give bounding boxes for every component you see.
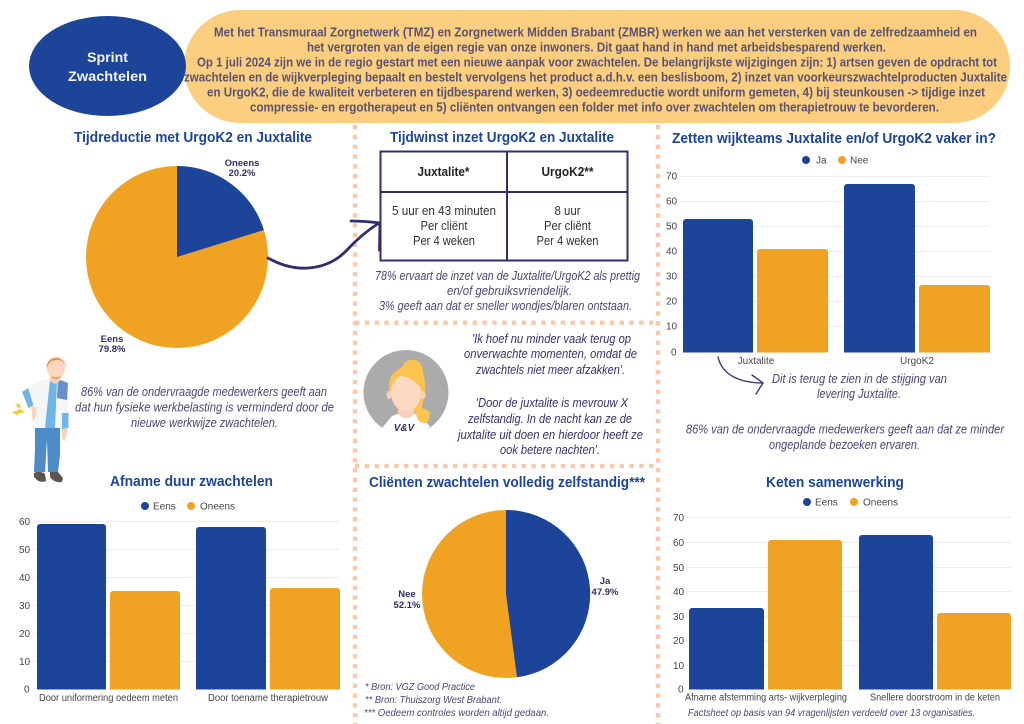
pie chart: zelfstandig: Ja	[600, 576, 611, 587]
legend: Oneens	[200, 502, 235, 512]
quotes: onverwachte momenten, omdat de	[464, 347, 637, 361]
bar chart: wijkteams: 20	[666, 296, 678, 308]
bar chart: afname duur: 50	[19, 545, 31, 556]
pie chart: tijdreductie: 79.8%	[99, 344, 126, 355]
heading: Tijdreductie: Tijdreductie met UrgoK2 en Juxtalite	[74, 130, 312, 146]
table: tijdwinst: Per cliënt	[544, 218, 591, 233]
bar chart: keten samenwerking: 10	[673, 661, 685, 672]
table: tijdwinst: Per 4 weken	[413, 233, 475, 248]
bar chart: keten samenwerking: 40	[673, 587, 685, 598]
text: fysieke werkbelasting: nieuwe werkwijze zwachtelen.	[131, 416, 278, 430]
table: tijdwinst: Per 4 weken	[536, 233, 598, 248]
avatar: V&V	[364, 350, 448, 436]
pie chart: zelfstandig: Nee	[398, 589, 416, 600]
arrow: curved to levering text	[718, 357, 763, 394]
arrow: pie to table	[268, 221, 380, 268]
quotes: zwachtels niet meer afzakken'.	[475, 363, 625, 377]
bar chart: wijkteams: UrgoK2	[900, 356, 934, 367]
pie chart: zelfstandig: 47.9%	[592, 587, 619, 598]
heading: Tijdwinst: Tijdwinst inzet UrgoK2 en Juxtalite	[390, 130, 614, 146]
intro banner: compressie- en ergotherapeut en 5) cliënten ontvangen een folder met info over zwachtelen om therapietrouw te bevorderen.	[250, 100, 939, 114]
table: tijdwinst: UrgoK2**	[542, 165, 594, 179]
bar chart: afname duur: 0	[24, 684, 30, 696]
bar chart: afname duur: 60	[19, 517, 31, 528]
bar chart: afname duur: 30	[19, 601, 31, 612]
text: stijging levering: Dit is terug te zien in de stijging van	[772, 372, 947, 386]
bar chart: afname duur: 10	[19, 657, 31, 668]
legend	[141, 502, 235, 512]
bar chart: keten samenwerking: 20	[673, 636, 685, 647]
quotes: 'Ik hoef nu minder vaak terug op	[472, 332, 631, 346]
bar chart: afname duur	[19, 502, 340, 704]
footnotes	[364, 682, 549, 719]
text: gebruiksvriendelijkheid	[375, 269, 640, 313]
bar chart: afname duur: 40	[19, 573, 31, 584]
intro banner: en UrgoK2, die de kwaliteit verbeteren en tijdbesparend werken, 3) oedeemreductie wordt uniform gemeten, 4) bij steunkousen -> tijdige inzet	[207, 86, 986, 100]
pie chart: tijdreductie: Oneens	[225, 158, 259, 169]
heading: Afname duur: Afname duur zwachtelen	[110, 474, 273, 490]
legend	[802, 156, 869, 166]
table: tijdwinst	[380, 151, 628, 261]
bar chart: keten samenwerking: 0	[678, 684, 684, 696]
title badge: Sprint Zwachtelen: Sprint	[87, 49, 128, 65]
text: minder ongeplande bezoeken	[686, 422, 1005, 452]
bar chart: afname duur: Door uniformering oedeem meten	[39, 693, 178, 704]
intro banner: het vergroten van de eigen regie van onze inwoners. Dit gaat hand in hand met arbeidsbesparend werken.	[307, 40, 886, 54]
bar chart: wijkteams: 70	[666, 172, 678, 182]
heading: Cliënten zelfstandig: Cliënten zwachtelen volledig zelfstandig***	[369, 475, 645, 491]
heading: Keten samenwerking: Keten samenwerking	[766, 475, 904, 491]
table: tijdwinst: Per cliënt	[420, 218, 468, 233]
bar chart: keten samenwerking: 30	[673, 612, 685, 623]
bar chart: wijkteams: 40	[666, 246, 678, 258]
bar chart: wijkteams: 60	[666, 196, 678, 208]
legend: Eens	[815, 498, 838, 508]
pie chart: tijdreductie: Eens	[101, 334, 123, 345]
pie chart: tijdreductie: 20.2%	[229, 168, 256, 179]
bar chart: wijkteams	[666, 156, 990, 367]
bar chart: afname duur: Door toename therapietrouw	[208, 693, 329, 704]
quotes: 'Door de juxtalite is mevrouw X	[476, 396, 629, 410]
table: tijdwinst: 8 uur	[554, 203, 581, 218]
heading: Zetten wijkteams: Zetten wijkteams Juxtalite en/of UrgoK2 vaker in?	[672, 131, 996, 147]
bar chart: wijkteams: 30	[666, 272, 678, 282]
intro banner: Met het Transmuraal Zorgnetwerk (TMZ) en Zorgnetwerk Midden Brabant (ZMBR) werken we aan het versterken van de zelfredzaamheid en	[214, 26, 977, 40]
text: stijging levering: levering Juxtalite.	[817, 387, 901, 401]
intro banner	[184, 10, 1010, 123]
illustration: care worker with back pain	[12, 356, 68, 482]
legend	[803, 498, 898, 508]
text: gebruiksvriendelijkheid: 78% ervaart de inzet van de Juxtalite/UrgoK2 als prettig	[375, 269, 640, 283]
footnotes: * Bron: VGZ Good Practice	[365, 682, 475, 693]
bar chart: keten samenwerking: 50	[673, 563, 685, 574]
bar chart: wijkteams: 50	[666, 222, 678, 232]
quotes: zelfstandig. In de nacht kan ze de	[467, 412, 632, 426]
bar chart: keten samenwerking: Afname afstemming arts- wijkverpleging	[685, 692, 847, 704]
bar chart: keten samenwerking: Snellere doorstroom in de keten	[870, 692, 1000, 704]
bar chart: wijkteams: 0	[671, 348, 677, 358]
footer note: Factsheet op basis van 94 vragenlijsten verdeeld over 13 organisaties.	[688, 708, 975, 719]
quotes	[456, 332, 643, 457]
title badge: Sprint Zwachtelen	[29, 16, 186, 116]
footnotes: ** Bron: Thuiszorg West Brabant.	[365, 695, 502, 706]
bar chart: keten samenwerking	[673, 498, 1012, 704]
pie chart: tijdreductie	[86, 158, 268, 355]
table: tijdwinst: 5 uur en 43 minuten	[392, 203, 496, 218]
footnotes: *** Oedeem controles worden altijd gedaan.	[364, 708, 549, 719]
pie chart: zelfstandig	[394, 510, 619, 678]
bar chart: wijkteams: 10	[666, 322, 678, 332]
bar chart: keten samenwerking: 60	[673, 538, 685, 549]
quotes: ook betere nachten'.	[500, 443, 600, 457]
legend: Ja	[816, 156, 827, 166]
avatar: V&V: V&V	[394, 423, 416, 434]
table: tijdwinst: Juxtalite*	[418, 165, 470, 179]
text: gebruiksvriendelijkheid: 3% geeft aan dat er sneller wondjes/blaren ontstaan.	[379, 299, 632, 313]
bar chart: afname duur: 20	[19, 629, 31, 640]
text: gebruiksvriendelijkheid: en/of gebruiksvriendelijk.	[447, 284, 572, 298]
text: fysieke werkbelasting: dat hun fysieke werkbelasting is verminderd door de	[75, 400, 334, 414]
text: fysieke werkbelasting: 86% van de ondervraagde medewerkers geeft aan	[81, 385, 327, 399]
legend: Oneens	[863, 498, 898, 508]
pie chart: zelfstandig: 52.1%	[394, 600, 421, 611]
quotes: juxtalite uit doen en hierdoor heeft ze	[456, 428, 643, 442]
legend: Nee	[850, 156, 869, 166]
bar chart: keten samenwerking: 70	[673, 513, 685, 524]
text: stijging levering	[772, 372, 947, 401]
text: fysieke werkbelasting	[75, 385, 334, 430]
text: minder ongeplande bezoeken: ongeplande bezoeken ervaren.	[769, 438, 920, 452]
title badge: Sprint Zwachtelen: Zwachtelen	[68, 68, 147, 84]
legend: Eens	[153, 502, 176, 512]
bar chart: wijkteams: Juxtalite	[738, 356, 775, 367]
